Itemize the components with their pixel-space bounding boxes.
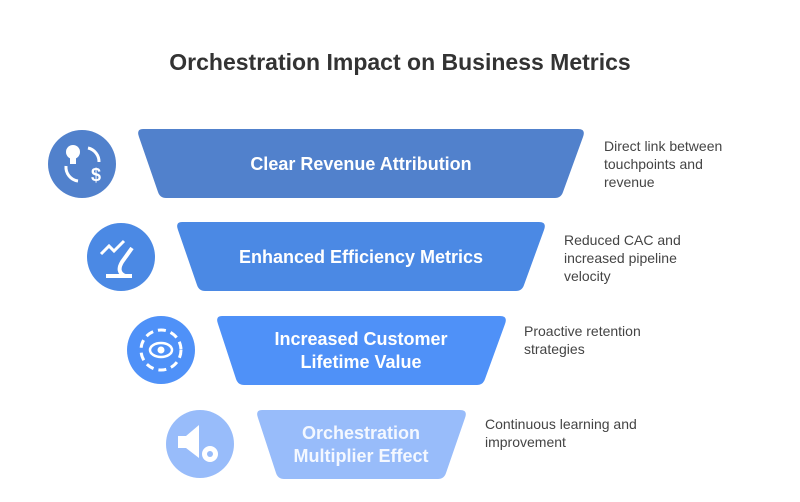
description 3: strategies (524, 341, 585, 357)
description 2: Reduced CAC and (564, 232, 681, 248)
bar 4: Orchestration Multiplier Effect: Multiplier Effect (293, 446, 429, 466)
description 4: Continuous learning and (485, 416, 637, 432)
description 1: Direct link between (604, 138, 722, 154)
icon 3: eye cycle (127, 316, 195, 384)
description 3: Proactive retention (524, 323, 641, 339)
description 3 (524, 323, 641, 357)
icon 2: microscope with trend (87, 223, 155, 291)
description 1: touchpoints and (604, 156, 703, 172)
bar 2: Enhanced Efficiency Metrics: Enhanced Efficiency Metrics (239, 247, 483, 267)
icon 4: megaphone gear (166, 410, 234, 478)
description 2: increased pipeline (564, 250, 677, 266)
bar 1: Clear Revenue Attribution (138, 129, 584, 198)
icon 1: idea to revenue: $ (91, 165, 101, 185)
icon 1: idea to revenue (48, 130, 116, 198)
bar 3: Increased Customer Lifetime Value: Increased Customer (274, 329, 448, 349)
bar 1: Clear Revenue Attribution: Clear Revenue Attribution (250, 154, 472, 174)
bar 3: Increased Customer Lifetime Value (217, 316, 506, 385)
bar 2: Enhanced Efficiency Metrics (177, 222, 545, 291)
bar 4: Orchestration Multiplier Effect: Orchestration (302, 423, 420, 443)
bar 4: Orchestration Multiplier Effect (257, 410, 466, 479)
description 2: velocity (564, 268, 611, 284)
description 4 (485, 416, 637, 450)
bar 3: Increased Customer Lifetime Value: Lifetime Value (300, 352, 422, 372)
title: Orchestration Impact on Business Metrics (169, 49, 631, 75)
description 1 (604, 138, 722, 190)
description 2 (564, 232, 681, 284)
description 4: improvement (485, 434, 566, 450)
description 1: revenue (604, 174, 655, 190)
